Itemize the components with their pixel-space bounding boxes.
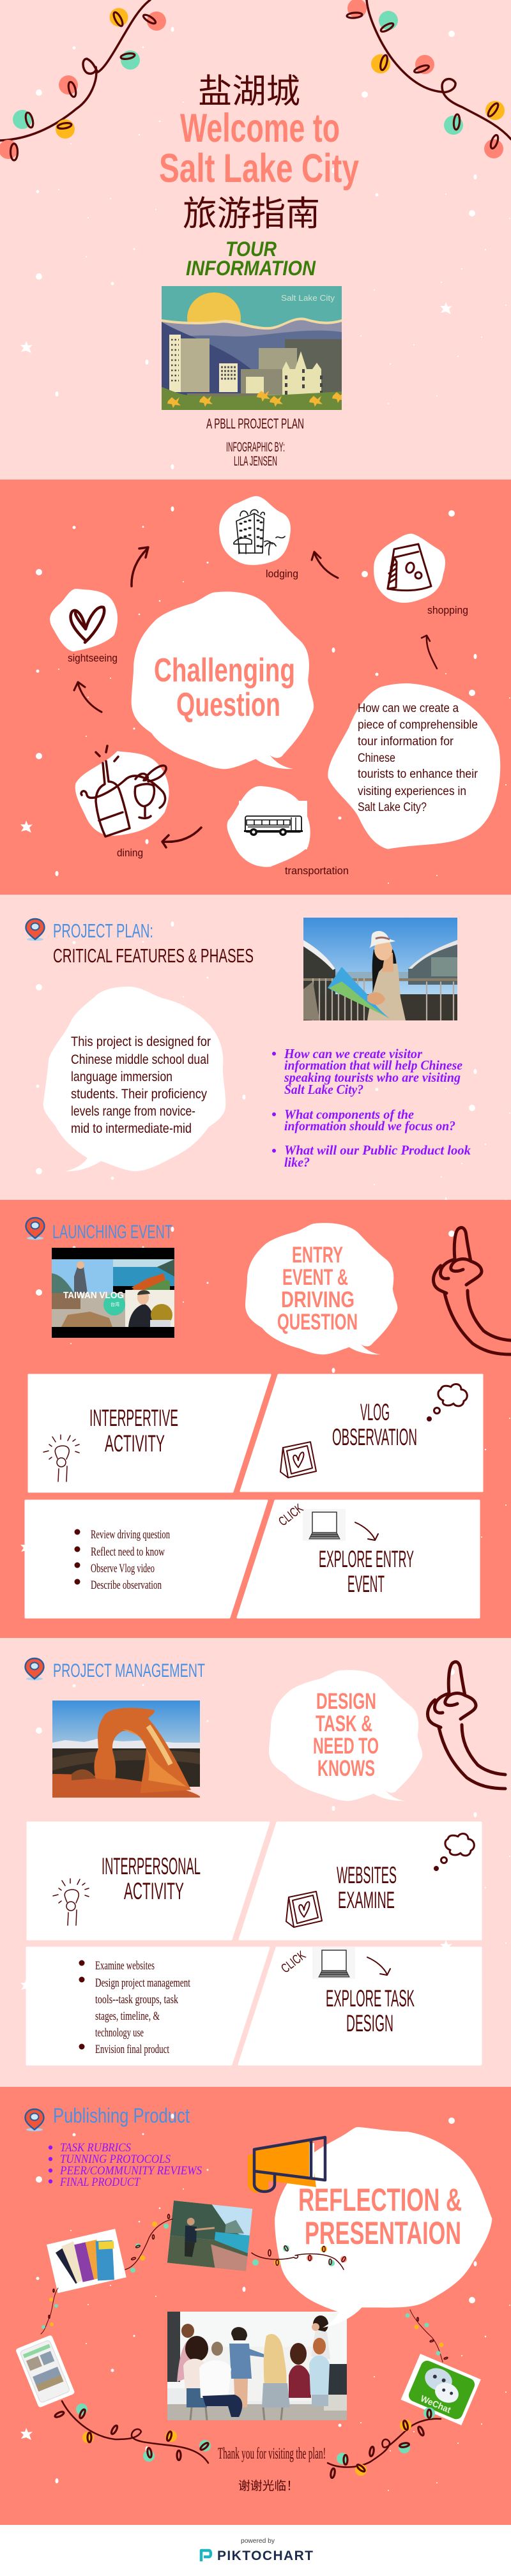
card: interpretive activity <box>29 1375 270 1492</box>
icon: pointing hand <box>433 1227 511 1354</box>
photo: brochures <box>47 2229 126 2293</box>
photo: Delicate Arch <box>52 1701 200 1798</box>
heading: project plan: PROJECT PLAN: <box>53 920 153 942</box>
footer: powered by Piktochart: powered by <box>241 2538 275 2545</box>
subtitle: tour information: TOUR <box>225 238 277 261</box>
card: activity list: Review driving question <box>91 1528 170 1542</box>
icon: location pin <box>26 919 45 941</box>
icon: bottle and wine glass <box>81 746 166 837</box>
arrow: sightseeing to lodging <box>132 547 148 586</box>
logo: Piktochart mark <box>201 2550 211 2561</box>
title: Salt Lake City: Salt Lake City <box>159 146 359 191</box>
text: thank you: Thank you for visiting the plan! <box>218 2445 326 2462</box>
icon: megaphone <box>248 2137 325 2193</box>
bubble: transportation with bus icon <box>227 786 310 867</box>
icon: raised hand <box>53 1879 89 1925</box>
section: challenging question background <box>0 480 511 895</box>
icon: laptop <box>303 1509 346 1541</box>
heading: launching event: LAUNCHING EVENT <box>52 1222 172 1243</box>
photo: Taiwan vlog thumbnail <box>52 1248 174 1338</box>
arrow: to explore <box>355 1522 378 1540</box>
list: publishing items: TASK RUBRICS <box>60 2141 131 2155</box>
heading: challenging: Challenging <box>154 652 295 689</box>
card: management list: stages, timeline, & <box>95 2010 160 2023</box>
text: project description <box>71 1034 211 1136</box>
subtitle: tour information <box>186 238 316 280</box>
section: launching event background <box>0 1200 511 1638</box>
icon: hotel <box>234 510 285 555</box>
arrow: to explore <box>367 1957 390 1975</box>
icon: bus <box>244 816 303 836</box>
icon: shopping bag <box>388 544 431 591</box>
title: Chinese city name: 盐湖城 <box>198 73 300 110</box>
list: publishing items: TUNNING PROTOCOLS <box>60 2153 171 2166</box>
card: management list: technology use <box>95 2026 144 2040</box>
string lights: bottom left <box>54 2401 211 2463</box>
footer: powered by Piktochart <box>201 2538 313 2563</box>
bubble: driving question text: How can we create a <box>358 702 459 715</box>
label: click: CLICK <box>278 1948 309 1976</box>
subtitle: tour information: INFORMATION <box>186 257 316 280</box>
speech bubble: design task and need to knows <box>269 1670 422 1801</box>
list: publishing items: FINAL PRODUCT <box>59 2176 141 2189</box>
string lights: small left <box>41 2288 58 2334</box>
section: title background <box>0 0 511 480</box>
string lights: small right <box>405 2310 448 2362</box>
speech bubble: entry event and driving question: DRIVING <box>281 1287 355 1312</box>
bubble: lodging with hotel icon <box>219 496 291 565</box>
label: shopping: shopping <box>427 604 468 616</box>
string lights: top right <box>347 0 511 158</box>
speech bubble: entry event and driving question: QUESTION <box>277 1310 358 1335</box>
central speech bubble: challenging question <box>132 591 314 769</box>
speech bubble: project description <box>43 987 225 1171</box>
list: guiding questions: How can we create visitor <box>284 1046 423 1061</box>
card: interpretive activity: INTERPERTIVE <box>89 1405 178 1431</box>
photo: Taiwan vlog thumbnail: 台湾 <box>111 1301 119 1307</box>
icon: location pin <box>26 1218 45 1240</box>
footer: powered by Piktochart: PIKTOCHART <box>217 2549 313 2563</box>
card: explore entry event: EVENT <box>347 1571 385 1597</box>
card: interpretive activity: ACTIVITY <box>105 1430 165 1457</box>
section: project plan background <box>0 895 511 1200</box>
list: guiding questions: speaking tourists who are visiting <box>284 1070 461 1085</box>
card: websites examine: WEBSITES <box>337 1862 397 1888</box>
card: activity list: Observe Vlog video <box>91 1562 155 1575</box>
text: a PBLL project plan: A PBLL PROJECT PLAN <box>206 416 304 432</box>
icon: location pin <box>26 1658 43 1681</box>
card: explore task design: EXPLORE TASK <box>326 1985 415 2012</box>
card: vlog observation: VLOG <box>360 1399 390 1425</box>
text: project description: Chinese middle school dual <box>71 1052 209 1067</box>
card: vlog observation <box>241 1375 482 1491</box>
list: guiding questions: like? <box>284 1155 310 1170</box>
string lights: small top <box>125 2215 172 2273</box>
icon: pointing hand <box>427 1662 505 1789</box>
list: guiding questions: information should we focus on? <box>284 1118 455 1133</box>
speech bubble: entry event and driving question: ENTRY <box>292 1243 343 1268</box>
speech bubble: design task and need to knows: DESIGN <box>316 1689 376 1714</box>
speech bubble: entry event and driving question <box>245 1223 397 1354</box>
icon: heart <box>71 607 104 642</box>
speech bubble: entry event and driving question: EVENT & <box>282 1265 348 1290</box>
text: project description: language immersion <box>71 1070 172 1084</box>
card: explore entry event <box>238 1501 479 1618</box>
section: project management background <box>0 1638 511 2087</box>
card: activity list <box>26 1501 267 1618</box>
card: interpersonal activity: ACTIVITY <box>124 1878 184 1904</box>
label: lodging: lodging <box>266 568 298 580</box>
photo: traveler at viewpoint <box>167 2201 252 2271</box>
label: transportation: transportation <box>285 865 349 877</box>
icon: thought cloud <box>428 1384 467 1420</box>
text: infographic credit <box>226 440 285 469</box>
text: project description: levels range from novice- <box>71 1104 195 1119</box>
illustration: Salt Lake City skyline <box>162 286 342 410</box>
label: click: CLICK <box>276 1501 306 1529</box>
text: Chinese thank you: 谢谢光临！ <box>238 2479 298 2493</box>
icon: location pin <box>26 2109 43 2132</box>
photo: Taiwan vlog thumbnail: TAIWAN VLOG <box>63 1290 124 1301</box>
photo: classroom presentation <box>167 2312 347 2420</box>
card: management list: Envision final product <box>95 2043 169 2056</box>
card: management list: Design project management <box>95 1976 190 1990</box>
footer background <box>0 2525 511 2576</box>
card: management list <box>27 1948 269 2065</box>
card: vlog observation: OBSERVATION <box>332 1424 417 1450</box>
heading: project management: PROJECT MANAGEMENT <box>53 1660 205 1681</box>
card: management list: Examine websites <box>95 1959 155 1973</box>
speech bubble: reflection and presentation <box>275 2127 492 2328</box>
title: Welcome to: Welcome to <box>180 106 340 151</box>
arrow: dining to sightseeing <box>74 682 102 712</box>
bubble: driving question text: tourists to enhance their <box>358 768 478 781</box>
card: management list: tools--task groups, task <box>95 1993 178 2006</box>
icon: laptop <box>312 1947 355 1979</box>
bubble: sightseeing with heart icon <box>50 589 118 651</box>
text: INFOGRAPHIC BY: <box>226 440 285 455</box>
string lights: top left <box>0 0 166 160</box>
card: activity list: Reflect need to know <box>91 1545 165 1559</box>
card: explore entry event: EXPLORE ENTRY <box>319 1546 414 1572</box>
photo: tourist holding map <box>303 918 457 1020</box>
illustration: Salt Lake City skyline: Salt Lake City <box>281 293 335 303</box>
heading: question: Question <box>176 686 280 724</box>
section: publishing product background <box>0 2087 511 2525</box>
bubble: shopping with bag icon <box>374 534 445 603</box>
photo: tour app on phone <box>15 2335 75 2408</box>
speech bubble: design task and need to knows: TASK & <box>316 1711 372 1736</box>
list: guiding questions: Salt Lake City? <box>284 1082 363 1097</box>
card: activity list: Describe observation <box>91 1579 162 1592</box>
logo: WeChat: WeChat <box>419 2393 453 2415</box>
card: explore task design <box>239 1947 481 2065</box>
card: interpersonal activity: INTERPERSONAL <box>102 1853 201 1879</box>
bubble: dining with bottle and glass icon <box>75 746 169 837</box>
list: guiding questions: What will our Public Product look <box>284 1142 471 1158</box>
heading: publishing product: Publishing Product <box>53 2104 190 2127</box>
icon: raised hand <box>43 1435 79 1481</box>
bubble: driving question text: Chinese <box>358 752 395 765</box>
card: interpersonal activity <box>27 1822 269 1939</box>
card: websites examine: EXAMINE <box>338 1887 395 1913</box>
list: guiding questions: What components of the <box>284 1107 414 1122</box>
text: project description: This project is designed for <box>71 1034 211 1049</box>
list: publishing items <box>49 2141 202 2189</box>
list: guiding questions <box>272 1046 471 1170</box>
speech bubble: design task and need to knows: NEED TO <box>313 1734 379 1759</box>
title: Chinese tour guide: 旅游指南 <box>183 195 320 233</box>
bubble: driving question text: tour information for <box>358 735 454 748</box>
arrow: question to shopping <box>422 635 437 669</box>
string lights: across bubble <box>252 2245 347 2269</box>
arrow: transportation to dining <box>162 828 201 847</box>
logo: WeChat <box>401 2354 481 2425</box>
text: project description: students. Their proficiency <box>71 1087 207 1102</box>
speech bubble: design task and need to knows: KNOWS <box>317 1756 375 1781</box>
arrow: shopping to lodging <box>312 552 338 578</box>
heading: critical features and phases: CRITICAL FEATURES & PHASES <box>53 944 254 967</box>
text: project description: mid to intermediate-mid <box>71 1121 192 1136</box>
card: explore task design: DESIGN <box>346 2010 393 2036</box>
list: publishing items: PEER/COMMUNITY REVIEWS <box>59 2164 202 2178</box>
icon: thought cloud <box>434 1833 474 1870</box>
bubble: driving question text: piece of comprehensible <box>358 718 478 732</box>
text: infographic credit: LILA JENSEN <box>234 454 277 469</box>
card: websites examine <box>240 1822 481 1939</box>
icon: picture frame <box>286 1891 322 1927</box>
icon: picture frame <box>280 1442 316 1478</box>
bubble: driving question text <box>328 683 500 849</box>
label: sightseeing: sightseeing <box>68 652 118 664</box>
bubble: driving question text: Salt Lake City? <box>358 801 427 814</box>
label: dining: dining <box>117 847 143 859</box>
list: guiding questions: information that will help Chinese <box>284 1057 462 1073</box>
string lights: bottom right <box>328 2407 441 2478</box>
bubble: driving question text: visiting experiences in <box>358 785 466 798</box>
